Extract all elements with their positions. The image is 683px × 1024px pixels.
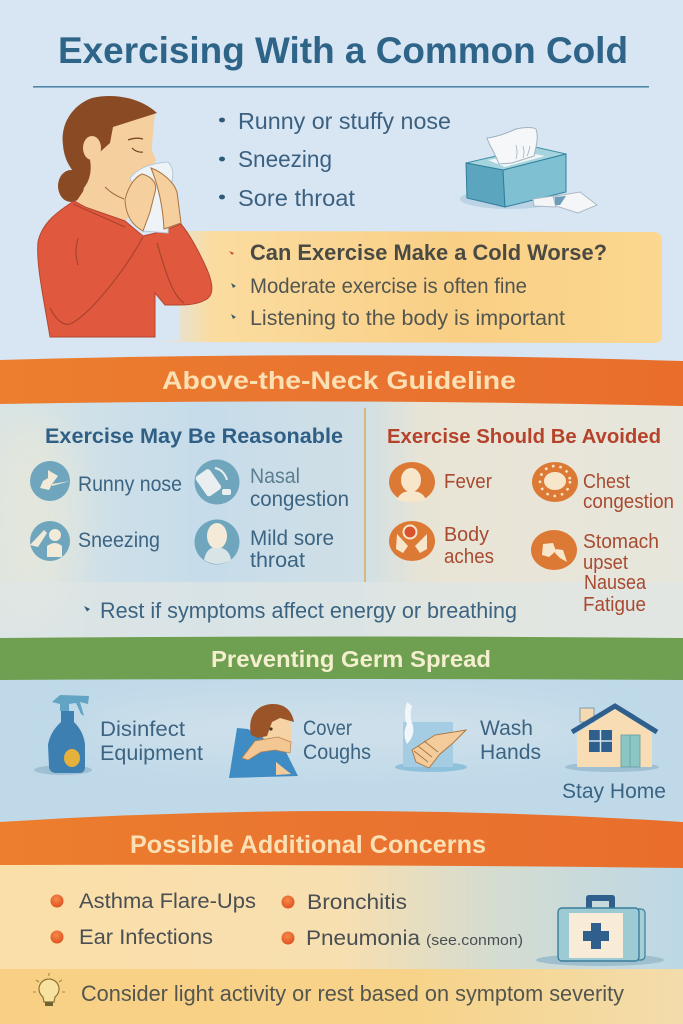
banner: above-the-neck guideline <box>0 355 683 406</box>
banner: above-the-neck guideline: Above-the-Neck Guideline <box>162 367 516 395</box>
item: ear infections: Ear Infections <box>79 925 213 949</box>
neck and face <box>76 112 156 222</box>
label: mild sore throat <box>250 527 334 572</box>
banner: preventing germ spread <box>0 636 683 680</box>
tissue <box>130 162 173 233</box>
label: stomach upset, nausea, fatigue <box>583 531 659 616</box>
label: body aches <box>444 524 494 568</box>
label: mild sore throat: Mild sore <box>250 527 334 550</box>
icon: house <box>565 706 659 772</box>
label: fever: Fever <box>444 471 492 493</box>
icon: spray bottle <box>34 695 92 775</box>
banner: possible additional concerns <box>0 811 683 868</box>
label: stomach upset, nausea, fatigue: Fatigue <box>583 594 646 616</box>
heading: Exercise May Be Reasonable <box>45 424 343 448</box>
label: wash hands: Wash <box>480 717 533 740</box>
label: stomach upset, nausea, fatigue: Stomach <box>583 531 659 553</box>
label: disinfect equipment: Equipment <box>100 742 203 765</box>
icon: washing hands <box>395 702 467 772</box>
hair <box>63 96 157 190</box>
label: nasal congestion <box>250 465 349 511</box>
label: wash hands: Hands <box>480 741 541 764</box>
icon: tissue box <box>460 128 597 213</box>
label: nasal congestion: Nasal <box>250 465 300 488</box>
label: chest congestion <box>583 471 674 513</box>
label: nasal congestion: congestion <box>250 488 349 511</box>
label: mild sore throat: throat <box>250 549 305 572</box>
banner: preventing germ spread: Preventing Germ Spread <box>211 646 491 672</box>
label: runny nose: Runny nose <box>78 473 182 496</box>
icon: first aid kit <box>536 895 664 966</box>
icon: nasal congestion <box>194 460 240 504</box>
sweater <box>38 201 212 337</box>
panel: exercise may be reasonable <box>30 424 349 572</box>
label: chest congestion: Chest <box>583 471 630 493</box>
icon: mild sore throat <box>194 520 240 564</box>
symptom: sneezing: Sneezing <box>238 146 332 172</box>
banner: possible additional concerns: Possible Additional Concerns <box>130 831 486 859</box>
item: pneumonia: Pneumonia <box>306 926 420 950</box>
label: cover coughs: Coughs <box>303 741 371 764</box>
icon: chest congestion <box>532 462 578 502</box>
label: stay home: Stay Home <box>562 780 666 803</box>
icon: sneezing <box>30 521 70 561</box>
panel: preventing germ spread items <box>34 695 666 803</box>
background: germ spread section <box>0 676 683 826</box>
icon: light bulb <box>33 973 65 1006</box>
icon: person covering cough <box>229 704 298 778</box>
panel: additional concerns list <box>50 889 523 950</box>
item: bronchitis: Bronchitis <box>307 890 407 914</box>
note: rest if symptoms affect energy or breathing: Rest if symptoms affect energy or breathing <box>100 598 517 623</box>
heading: Exercise Should Be Avoided <box>387 425 661 448</box>
icon: fever <box>389 462 435 502</box>
background: top section <box>0 0 683 362</box>
label: stomach upset, nausea, fatigue: upset <box>583 552 628 574</box>
callout: can exercise make a cold worse: Can Exercise Make a Cold Worse? <box>250 240 607 265</box>
icon: body aches <box>389 521 435 561</box>
note: consider light activity: Consider light activity or rest based on symptom severity <box>81 981 624 1006</box>
label: disinfect equipment <box>100 718 203 765</box>
symptom: sore throat: Sore throat <box>238 185 356 211</box>
item: asthma flare-ups: Asthma Flare-Ups <box>79 889 256 913</box>
callout: can exercise make a cold worse: Moderate exercise is often fine <box>250 275 527 298</box>
icon: runny nose <box>30 461 70 501</box>
symptom list <box>219 108 451 211</box>
callout: can exercise make a cold worse <box>150 231 662 343</box>
hair bun <box>58 170 84 202</box>
item: pneumonia <box>282 926 523 950</box>
label: body aches: Body <box>444 524 489 546</box>
ear <box>83 136 101 160</box>
illustration: woman blowing her nose <box>38 96 212 337</box>
right hand <box>151 168 181 229</box>
item: pneumonia: (see.conmon) <box>426 932 523 949</box>
left hand <box>125 174 156 231</box>
symptom: runny or stuffy nose: Runny or stuffy nose <box>238 108 451 134</box>
label: wash hands <box>480 717 541 764</box>
label: sneezing: Sneezing <box>78 529 160 552</box>
callout: can exercise make a cold worse: Listening to the body is important <box>250 307 565 330</box>
label: body aches: aches <box>444 546 494 568</box>
label: stomach upset, nausea, fatigue: Nausea <box>584 572 647 594</box>
icon: stomach upset <box>531 530 577 570</box>
label: disinfect equipment: Disinfect <box>100 718 185 741</box>
label: cover coughs <box>303 717 371 764</box>
label: cover coughs: Cover <box>303 717 352 740</box>
label: chest congestion: congestion <box>583 491 674 513</box>
panel: exercise should be avoided <box>387 425 674 616</box>
background: guideline section <box>0 400 683 640</box>
title: Exercising With a Common Cold <box>58 30 628 71</box>
background: concerns section <box>0 860 683 1024</box>
